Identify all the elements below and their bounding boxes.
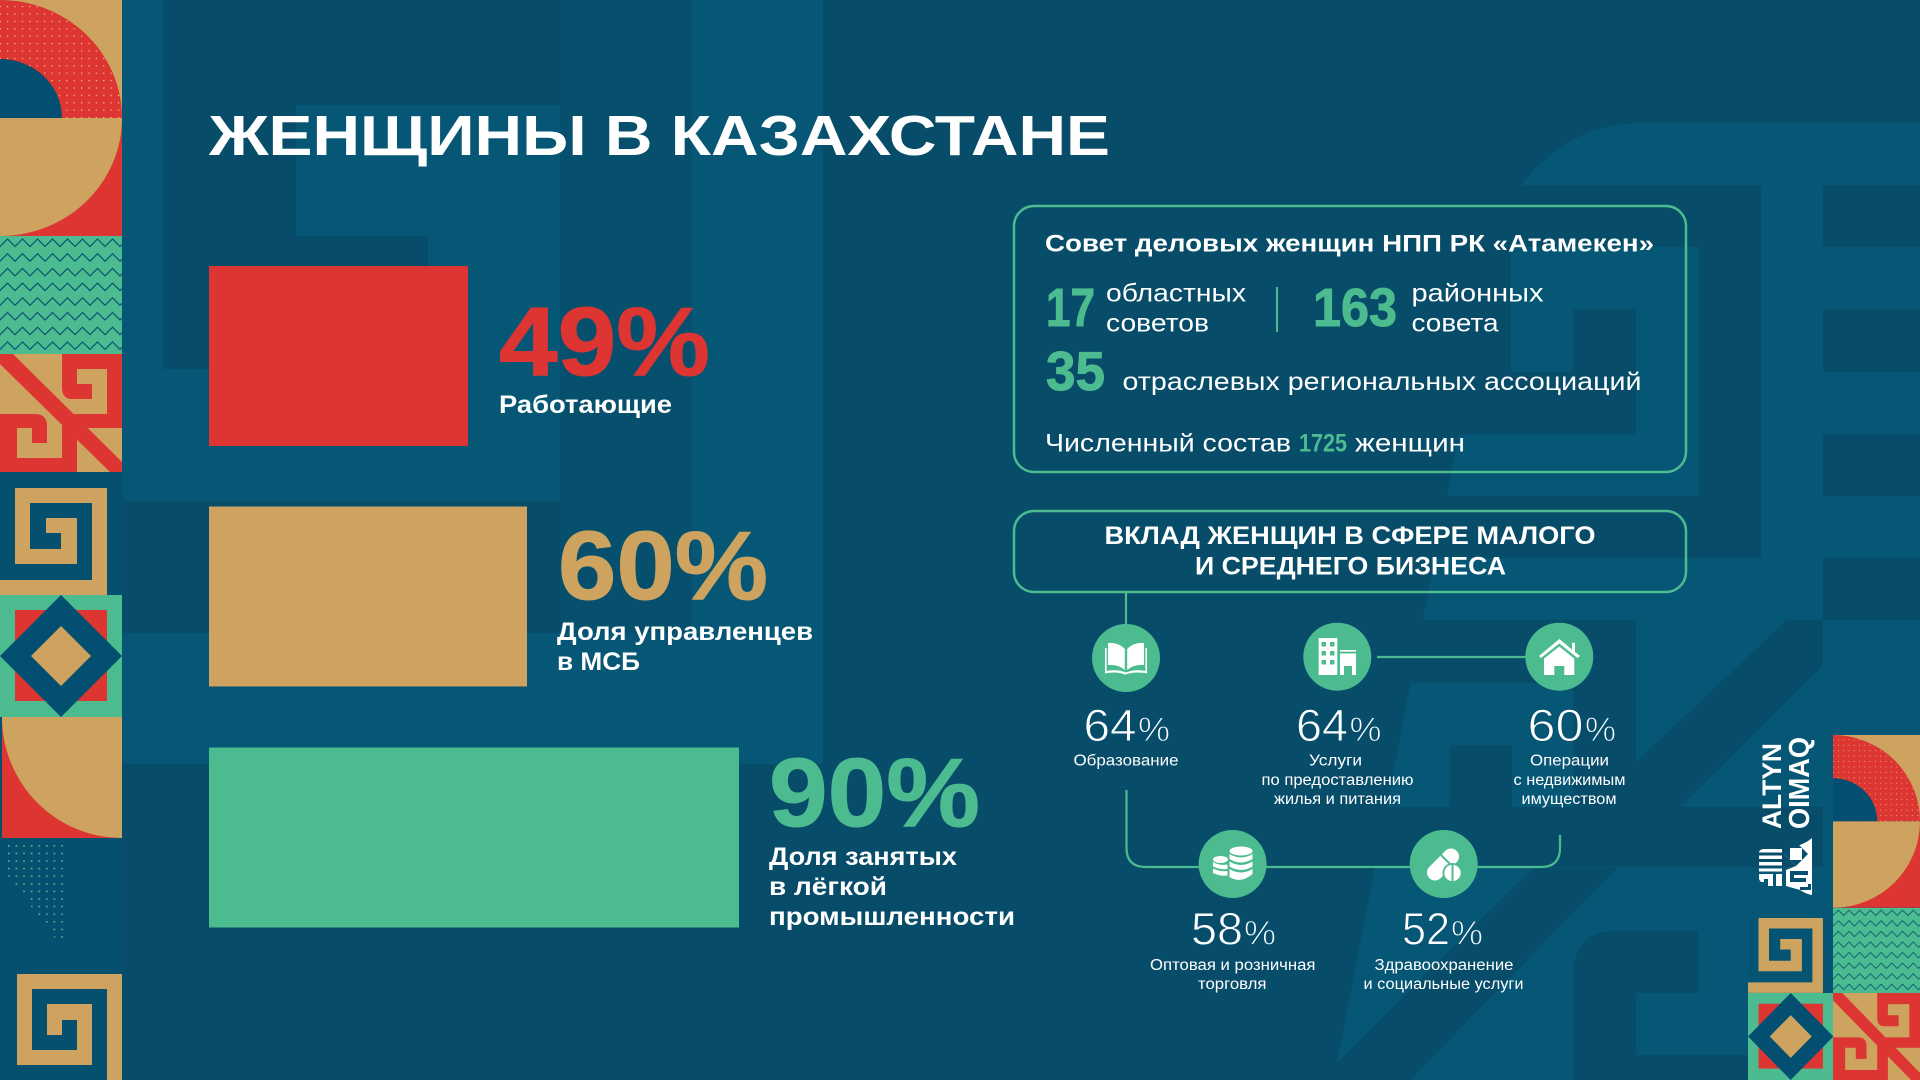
- item: accommodation and food 64%: по предоставлению: [1262, 772, 1414, 789]
- stat: 163 district councils: районных: [1412, 280, 1544, 308]
- item: healthcare 52%: [1364, 830, 1524, 993]
- bar: light industry 90%: 90%: [769, 738, 980, 847]
- item: real estate 60%: %: [1585, 711, 1616, 749]
- item: real estate 60%: 60: [1528, 700, 1584, 751]
- item: wholesale and retail 58%: Оптовая и розничная: [1150, 957, 1316, 974]
- item: healthcare 52%: Здравоохранение: [1374, 957, 1514, 974]
- item: wholesale and retail 58%: %: [1244, 914, 1276, 952]
- stat: 35 associations: [1046, 340, 1642, 402]
- bar: working women 49%: Работающие: [499, 391, 672, 419]
- logo: Altyn Oimaq: ALTYN: [1757, 743, 1787, 829]
- panel: SME contribution heading: ВКЛАД ЖЕНЩИН В СФЕРЕ МАЛОГО: [1104, 522, 1596, 550]
- stat: 163 district councils: совета: [1412, 310, 1499, 338]
- stat: 1725 women: [1045, 430, 1465, 458]
- stat: 163 district councils: 163: [1313, 278, 1397, 338]
- connector lines: [1126, 592, 1560, 867]
- icon: house: [1525, 623, 1593, 691]
- stat: 17 regional councils: областных: [1106, 280, 1247, 308]
- item: real estate 60%: Операции: [1530, 752, 1609, 770]
- logo: Altyn Oimaq: [1757, 737, 1816, 895]
- item: education 64%: 64: [1084, 700, 1136, 751]
- item: accommodation and food 64%: %: [1350, 711, 1382, 749]
- bar: light industry 90%: в лёгкой: [769, 873, 887, 901]
- bar: managers 60%: в МСБ: [557, 648, 640, 676]
- icon: open book: [1092, 624, 1160, 692]
- item: education 64%: Образование: [1074, 752, 1178, 770]
- stat: 17 regional councils: [1046, 278, 1247, 338]
- stat: 1725 women: женщин: [1355, 430, 1465, 458]
- bar: light industry 90%: [209, 738, 1015, 931]
- item: education 64%: %: [1138, 711, 1170, 749]
- logo emblem: [1759, 838, 1812, 895]
- item: healthcare 52%: 52: [1402, 904, 1450, 954]
- item: wholesale and retail 58%: [1150, 830, 1316, 993]
- icon: coins: [1199, 830, 1267, 898]
- item: real estate 60%: [1514, 623, 1626, 808]
- item: accommodation and food 64%: [1262, 623, 1414, 808]
- bar: working women 49%: [209, 266, 710, 446]
- logo: Altyn Oimaq: OIMAQ: [1784, 737, 1816, 829]
- stat: 163 district councils: [1313, 278, 1544, 338]
- bar: managers 60%: Доля управленцев: [557, 618, 813, 646]
- item: real estate 60%: имуществом: [1522, 791, 1616, 808]
- item: healthcare 52%: %: [1451, 914, 1483, 952]
- panel: SME contribution heading: [1014, 511, 1686, 592]
- item: education 64%: [1074, 624, 1178, 770]
- icon: pills: [1410, 830, 1478, 898]
- stat: 17 regional councils: 17: [1046, 278, 1095, 338]
- panel: business women council: [1014, 206, 1686, 472]
- item: wholesale and retail 58%: торговля: [1198, 976, 1266, 993]
- item: accommodation and food 64%: 64: [1296, 700, 1348, 751]
- stat: 35 associations: отраслевых региональных ассоциаций: [1122, 368, 1642, 396]
- stat: 1725 women: Численный состав: [1045, 430, 1291, 458]
- item: healthcare 52%: и социальные услуги: [1364, 976, 1524, 993]
- item: accommodation and food 64%: Услуги: [1309, 752, 1362, 770]
- bar: light industry 90%: Доля занятых: [769, 843, 957, 871]
- panel: SME contribution heading: И СРЕДНЕГО БИЗНЕСА: [1195, 552, 1506, 580]
- item: accommodation and food 64%: жилья и питания: [1274, 791, 1401, 808]
- stat: 35 associations: 35: [1046, 340, 1105, 402]
- icon: buildings: [1303, 623, 1371, 691]
- item: real estate 60%: с недвижимым: [1514, 772, 1626, 789]
- bar: working women 49%: 49%: [499, 287, 710, 396]
- right decorative ornament column: [1748, 735, 1920, 1080]
- panel heading: Совет деловых женщин НПП РК «Атамекен»: [1045, 230, 1654, 258]
- stat: 17 regional councils: советов: [1106, 310, 1209, 338]
- left decorative ornament column: [0, 0, 122, 1080]
- stat: 1725 women: 1725: [1299, 430, 1347, 458]
- bar: managers 60%: [209, 506, 813, 686]
- item: wholesale and retail 58%: 58: [1191, 904, 1243, 954]
- title: ЖЕНЩИНЫ В КАЗАХСТАНЕ: [208, 104, 1110, 168]
- bar: light industry 90%: промышленности: [769, 903, 1015, 931]
- bar: managers 60%: 60%: [558, 511, 768, 620]
